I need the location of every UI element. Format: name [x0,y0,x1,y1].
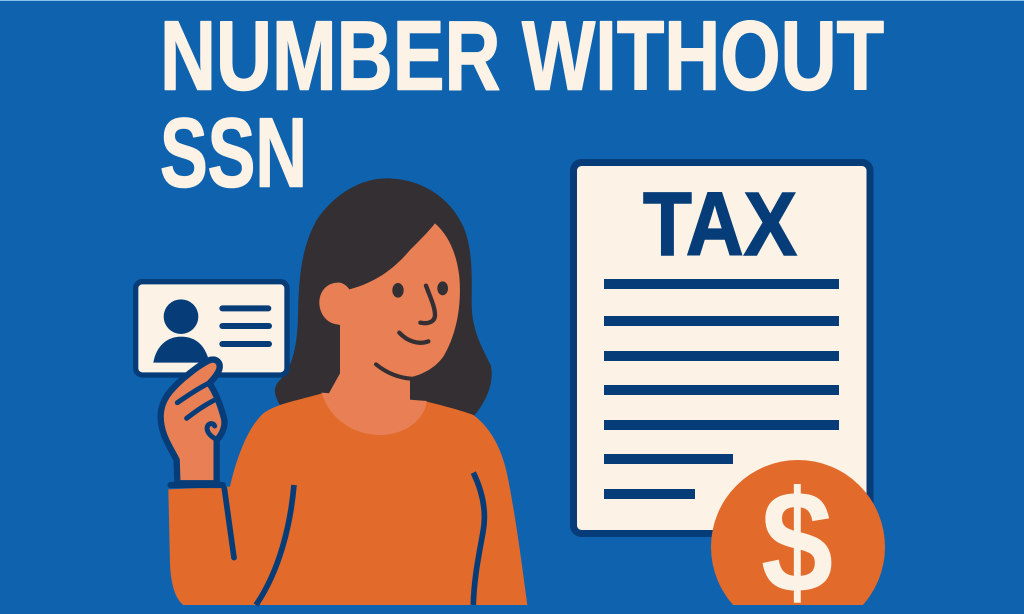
hand holding card [161,360,224,485]
shirt seams [224,473,484,605]
fingers [177,383,217,439]
title [160,0,884,208]
collar [322,393,427,435]
neck and face [319,223,460,403]
tax document [574,162,870,534]
card portrait [153,299,209,363]
shirt [168,393,527,605]
dollar coin [711,460,885,614]
document heading: TAX: TAX [643,175,797,275]
card lines [222,308,269,344]
facial features [376,281,448,379]
cuff [171,475,223,494]
hair [275,178,492,417]
title: SSN [160,98,307,208]
woman figure [136,178,527,605]
document text lines [604,279,839,499]
ID card [136,282,287,375]
